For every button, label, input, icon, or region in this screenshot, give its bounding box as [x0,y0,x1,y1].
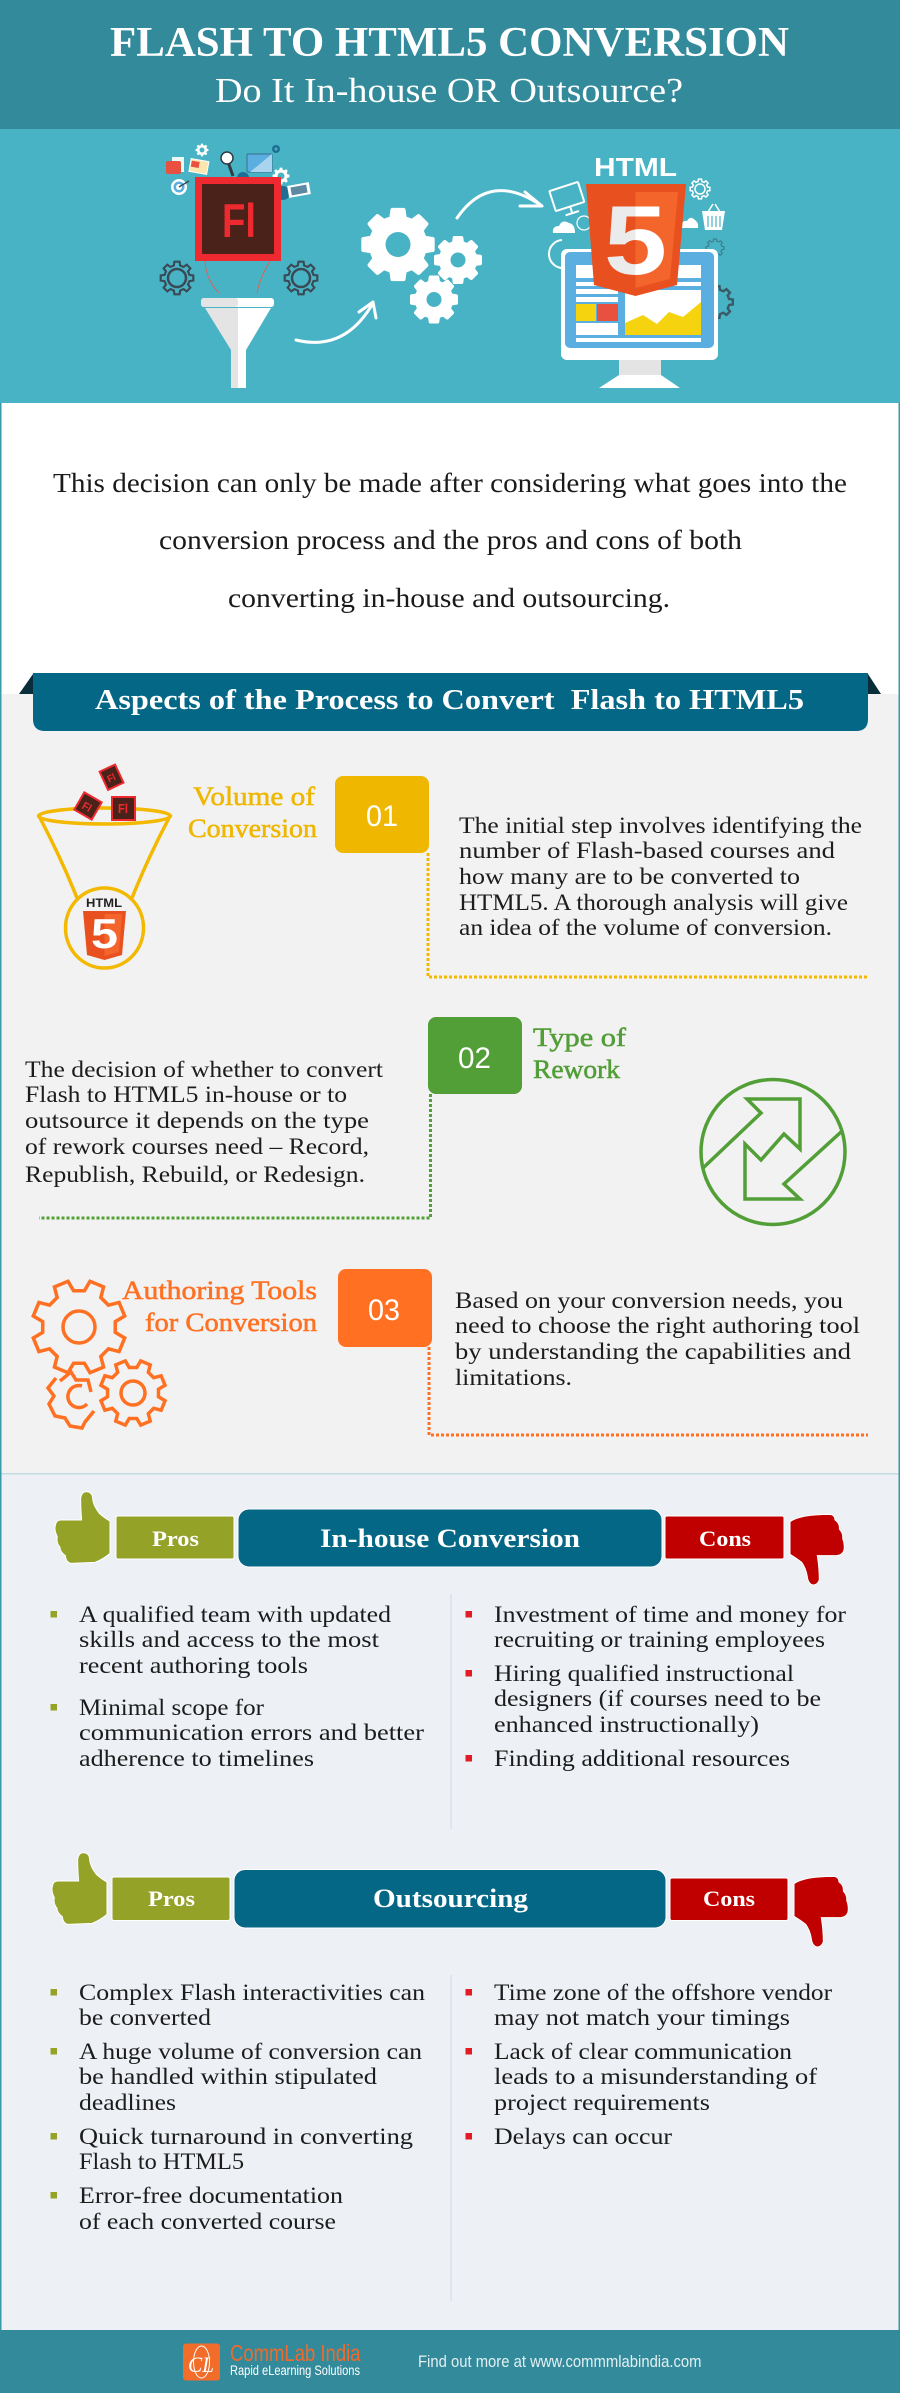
text block: step 2: of rework courses need – Record, [25,1134,369,1159]
arrow: funnel to gears [296,302,376,342]
list: in-house pros: A qualified team with updated [79,1602,392,1627]
heading: in-house conversion: In-house Conversion [320,1524,581,1553]
text block: step 1 [459,813,862,940]
label: pros: Pros [148,1886,195,1911]
icon: small icons around Flash [166,144,311,200]
text block: step 1: an idea of the volume of conversion. [459,915,832,940]
list: outsourcing pros: be converted [79,2005,212,2030]
label: pros [116,1516,234,1559]
icon: funnel with HTML5: Fl [118,801,128,816]
heading: volume of conversion: Volume of [193,782,315,811]
list: outsourcing pros: deadlines [79,2090,176,2115]
icon: dark gears beside funnel [161,262,317,294]
list: outsourcing cons: project requirements [494,2090,710,2115]
number box 02: 02 [458,1042,491,1075]
subtitle: Do It In-house OR Outsource? [215,71,683,110]
number box 01: 01 [366,800,398,833]
icon: CommLab logo: CL [188,2352,214,2377]
number box 02 [428,1017,522,1094]
text block: step 2: Republish, Rebuild, or Redesign. [25,1162,365,1187]
list: outsourcing pros: of each converted course [79,2209,336,2234]
panel: hero illustration [0,129,900,403]
text block: step 3: Based on your conversion needs, you [455,1288,844,1313]
text block: step 2 [25,1057,384,1187]
list: in-house cons: designers (if courses need to be [494,1686,821,1711]
heading: authoring tools: for Conversion [145,1308,317,1337]
text block: step 1: HTML5. A thorough analysis will give [459,890,848,915]
text block: step 3 [455,1288,860,1390]
list: in-house pros: adherence to timelines [79,1746,314,1771]
heading: type of rework: Rework [533,1055,620,1084]
list: outsourcing pros [50,1980,426,2234]
heading: volume of conversion [188,782,317,843]
icon label: HTML: HTML [594,152,677,182]
label: pros: Pros [152,1526,199,1551]
list: outsourcing cons: Time zone of the offshore vendor [494,1980,832,2005]
list: in-house pros: recent authoring tools [79,1653,308,1678]
list: in-house cons: recruiting or training employees [494,1627,825,1652]
icon: funnel with HTML5: 5 [91,910,118,957]
text block: introduction: This decision can only be made after considering what goes into the [53,468,847,498]
list: in-house cons: Investment of time and money for [494,1602,846,1627]
icon: thumbs down [794,1876,848,1947]
icon: HTML5 shield: 5 [604,185,667,295]
list: outsourcing pros: Flash to HTML5 [79,2149,244,2174]
text block: introduction: converting in-house and outsourcing. [228,583,670,613]
list: outsourcing cons: Lack of clear communication [494,2039,793,2064]
icon: Flash logo: Fl [222,194,256,247]
text block: step 2: outsource it depends on the type [25,1108,369,1133]
icon: thumbs down [790,1514,844,1585]
number box 03: 03 [368,1294,400,1327]
text block: step 3: by understanding the capabilities and [455,1339,852,1364]
brand tagline: Rapid eLearning Solutions [230,2363,360,2378]
list: in-house pros: Minimal scope for [79,1695,264,1720]
list: in-house cons: enhanced instructionally) [494,1712,759,1737]
icon: white gears [363,210,480,322]
label: cons: Cons [699,1526,751,1551]
heading: authoring tools: Authoring Tools [122,1276,317,1305]
panel: step 1 volume of conversion [38,765,868,977]
label: cons: Cons [703,1886,755,1911]
text block: step 2: Flash to HTML5 in-house or to [25,1082,347,1107]
list: in-house cons [466,1602,846,1771]
icon: thumbs up [52,1853,107,1924]
list: in-house pros: skills and access to the most [79,1627,380,1652]
list: outsourcing cons: leads to a misunderstanding of [494,2064,817,2089]
panel: footer [0,2330,900,2393]
text block: step 1: how many are to be converted to [459,864,800,889]
heading: outsourcing: Outsourcing [373,1884,528,1913]
text block: step 3: need to choose the right authoring tool [455,1313,860,1338]
heading: authoring tools [122,1276,317,1337]
text block: step 1: number of Flash-based courses and [459,838,836,863]
panel: step 3 authoring tools [18,1266,868,1436]
list: outsourcing pros: Complex Flash interactivities can [79,1980,426,2005]
icon: funnel with HTML5 [38,765,170,968]
heading: aspects banner [19,673,881,731]
icon: Flash logo [195,177,281,293]
list: in-house cons: Hiring qualified instructional [494,1661,794,1686]
panel: in-house conversion [50,1492,846,1829]
list: outsourcing pros: Quick turnaround in converting [79,2124,414,2149]
icon: HTML5 shield [586,184,686,296]
list: outsourcing pros: A huge volume of conversion can [79,2039,423,2064]
title: FLASH TO HTML5 CONVERSION [110,20,789,66]
heading: type of rework [533,1023,626,1084]
icon: small icons around HTML5 [549,179,733,318]
icon: funnel [201,298,274,388]
number box 03 [338,1269,432,1347]
list: outsourcing cons: may not match your timings [494,2005,790,2030]
label: cons [665,1516,784,1559]
icon: CommLab logo [183,2344,220,2380]
heading: type of rework: Type of [533,1023,626,1052]
text block: step 1: The initial step involves identifying the [459,813,862,838]
label: cons [670,1878,788,1920]
list: outsourcing pros: Error-free documentation [79,2183,344,2208]
icon: rework arrows [701,1080,845,1224]
list: in-house pros: communication errors and better [79,1720,424,1745]
connector: step 1 [428,853,868,977]
connector: step 2 [39,1094,430,1218]
number box 01 [335,776,429,853]
panel: outsourcing [50,1853,848,2301]
text block: step 3: limitations. [455,1365,572,1390]
icon: funnel with HTML5: HTML [86,896,122,910]
list: outsourcing pros: be handled within stipulated [79,2064,378,2089]
text block: introduction [53,468,847,613]
brand name: CommLab India [230,2340,361,2366]
list: in-house cons: Finding additional resources [494,1746,790,1771]
connector: step 3 [429,1347,868,1435]
arrow: gears to HTML5 [457,191,542,218]
heading: volume of conversion: Conversion [188,814,317,843]
icon: desktop monitor [561,249,718,388]
list: in-house pros [50,1602,424,1771]
panel: step 2 type of rework [25,1017,845,1224]
list: outsourcing cons [466,1980,832,2149]
icon: thumbs up [55,1492,110,1563]
heading: outsourcing [234,1870,666,1928]
label: pros [112,1877,230,1920]
list: outsourcing cons: Delays can occur [494,2124,672,2149]
heading: aspects banner: Aspects of the Process to Convert Flash to HTML5 [95,685,804,716]
heading: in-house conversion [238,1509,662,1567]
panel: title header [0,0,900,129]
text block: step 2: The decision of whether to convert [25,1057,384,1082]
icon: funnel with HTML5: Fl [106,772,118,785]
text block: introduction: conversion process and the pros and cons of both [159,525,743,555]
icon: orange gears [18,1266,176,1436]
website note: Find out more at www.commmlabindia.com [418,2352,702,2371]
icon: funnel with HTML5: Fl [80,800,93,815]
